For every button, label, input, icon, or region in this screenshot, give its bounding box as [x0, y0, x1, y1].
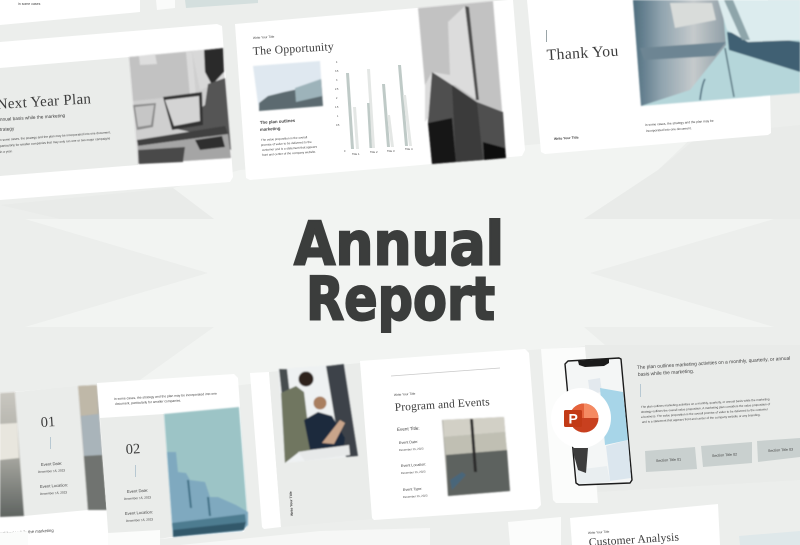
heading: Program and Events: Program and Events — [394, 396, 490, 414]
panel: vertical photo slide — [250, 363, 372, 529]
image: two men at table — [278, 364, 358, 463]
image: left interior — [0, 392, 24, 517]
text: top body: document, particularly for smaller companies. — [115, 399, 181, 406]
panel: top-left slide fragment: in some cases — [18, 2, 41, 6]
text: body: customer and is a statement that appears — [262, 145, 318, 152]
text: subtitle second line: trategy — [0, 126, 15, 132]
text: plan outlines — [260, 118, 296, 132]
panel: Next Year Plan slide — [0, 24, 233, 200]
text: body: a business. The value proposition is the overall promise of value to be delivered to the customer — [641, 407, 768, 419]
text: lead — [637, 356, 791, 378]
title: Annual Report: Annual — [294, 210, 504, 280]
image: window fragment — [739, 531, 800, 545]
panel: phone and section slide — [541, 345, 800, 503]
text: eyebrow: Write Your Title — [253, 35, 275, 40]
panel: slide 01 — [0, 385, 110, 545]
text: lead: The plan outlines marketing activities on a monthly, quarterly, or annual — [637, 356, 791, 371]
accent line — [640, 384, 641, 397]
event list: December 15, 2023 — [401, 469, 426, 475]
icon: PowerPoint badge — [551, 388, 611, 448]
title: Annual Report: Report — [306, 264, 495, 334]
bar chart — [335, 61, 413, 156]
text: footer body — [645, 119, 714, 133]
panel: Customer Analysis slide — [570, 504, 800, 545]
section buttons — [645, 438, 800, 472]
bar chart: 1 — [337, 115, 339, 118]
event details: December 15, 2023 — [126, 517, 153, 523]
text: body: front and center of the company website. — [262, 150, 316, 157]
panel: slide 02 — [97, 374, 248, 545]
text: body — [261, 135, 318, 157]
number 01: 01 — [40, 414, 56, 431]
text: eyebrow: Write Your Title — [588, 530, 610, 535]
text: top body: In some cases, the strategy and the plan may be incorporated into one — [114, 392, 217, 401]
title: Annual Report — [294, 210, 504, 334]
event list: December 15, 2023 — [403, 493, 428, 499]
bar chart: 0.5 — [336, 124, 340, 127]
image: person at laptop — [129, 48, 231, 164]
panel: Thank You slide — [527, 0, 800, 154]
text: body: strategy outlines the overall value proposition. A marketing plan considers the value proposition of — [641, 402, 770, 414]
event details: December 15, 2023 — [38, 468, 65, 474]
bar chart: Title 2 — [370, 150, 378, 154]
panel: bottom fragments — [0, 517, 561, 545]
image: steel architecture — [633, 0, 800, 106]
heading: The Opportunity: The Opportunity — [252, 40, 334, 58]
text: vertical label: Write Your Title — [289, 491, 294, 516]
event details — [38, 461, 68, 496]
icon: PowerPoint badge: P — [568, 410, 578, 426]
bar chart: 2 — [336, 97, 338, 100]
text: body: particularly for smaller companies that may only run one or two major campaigns — [0, 136, 111, 148]
text: body — [0, 130, 111, 154]
text: footer body: In some cases, the strategy and the plan may be — [645, 119, 714, 127]
image: office building — [253, 61, 323, 111]
accent line — [546, 30, 547, 42]
icon: smartphone — [565, 358, 632, 485]
text: subtitle: nnual basis while the marketing — [0, 113, 66, 122]
text: lead: basis while the marketing. — [638, 369, 694, 378]
text: plan outlines: marketing — [260, 126, 281, 132]
bar chart: 1.5 — [335, 106, 339, 109]
text: body: n some cases, the strategy and the plan may be incorporated into one document, — [0, 130, 111, 142]
section buttons: Section Title 01 — [656, 457, 681, 463]
event details — [124, 488, 153, 523]
text: body: promise of value to be delivered to the — [261, 140, 312, 147]
event details: Event Date: — [127, 488, 148, 494]
text: footer label: Write Your Title — [554, 135, 579, 141]
text: body — [641, 397, 770, 424]
bar chart: Title 3 — [387, 149, 395, 153]
panel: top small fragments — [156, 0, 258, 10]
number 02: 02 — [125, 441, 141, 458]
bar chart: 4 — [336, 61, 338, 64]
event details: Event Date: — [41, 461, 62, 467]
text: footer body: incorporated into one document. — [646, 126, 692, 133]
accent line — [50, 437, 51, 449]
event details: December 15, 2023 — [124, 495, 151, 501]
bar chart: 3 — [336, 79, 338, 82]
bar chart: Title 1 — [352, 152, 360, 156]
image: black and white tower — [418, 1, 506, 164]
image: glass lobby — [442, 417, 510, 496]
section buttons: Section Title 03 — [768, 447, 793, 453]
event details: December 15, 2023 — [40, 490, 67, 496]
panel: top-left slide fragment — [0, 0, 140, 25]
event list — [397, 426, 428, 499]
panel: The Opportunity slide — [235, 0, 525, 180]
event list: Event Date: — [399, 440, 418, 445]
text: body: and is a statement that appears front and center of the company website or any branding. — [642, 413, 761, 424]
event list: Event Type: — [403, 487, 422, 492]
event list: Event Location: — [401, 462, 426, 468]
panel: Program and Events slide — [360, 349, 541, 520]
text: plan outlines: The plan outlines — [260, 118, 296, 125]
event list: Event Title: — [397, 426, 420, 432]
text: body: The value proposition is the overall — [261, 135, 308, 142]
bar chart: Title 4 — [405, 147, 413, 151]
event details: Event Location: — [125, 509, 153, 516]
divider — [391, 368, 500, 376]
heading: Thank You: Thank You — [546, 43, 619, 64]
event details: Event Location: — [40, 482, 68, 489]
section buttons: Section Title 02 — [712, 452, 737, 458]
accent line — [135, 465, 136, 477]
bar chart: 0 — [344, 150, 346, 153]
bar chart: 3.5 — [335, 70, 339, 73]
text: body: in a year. — [0, 149, 13, 154]
text: top body — [114, 392, 217, 406]
text: eyebrow: Write Your Title — [394, 392, 416, 397]
image: right interior — [78, 385, 107, 510]
image: teal sky building — [164, 407, 248, 537]
event list: December 15, 2023 — [399, 446, 424, 452]
text: body: The plan outlines marketing activities on a monthly, quarterly, or annual basis while the marketing — [641, 397, 770, 409]
text: footer: ual basis while the marketing — [0, 528, 54, 536]
bar chart: 2.5 — [335, 88, 339, 91]
